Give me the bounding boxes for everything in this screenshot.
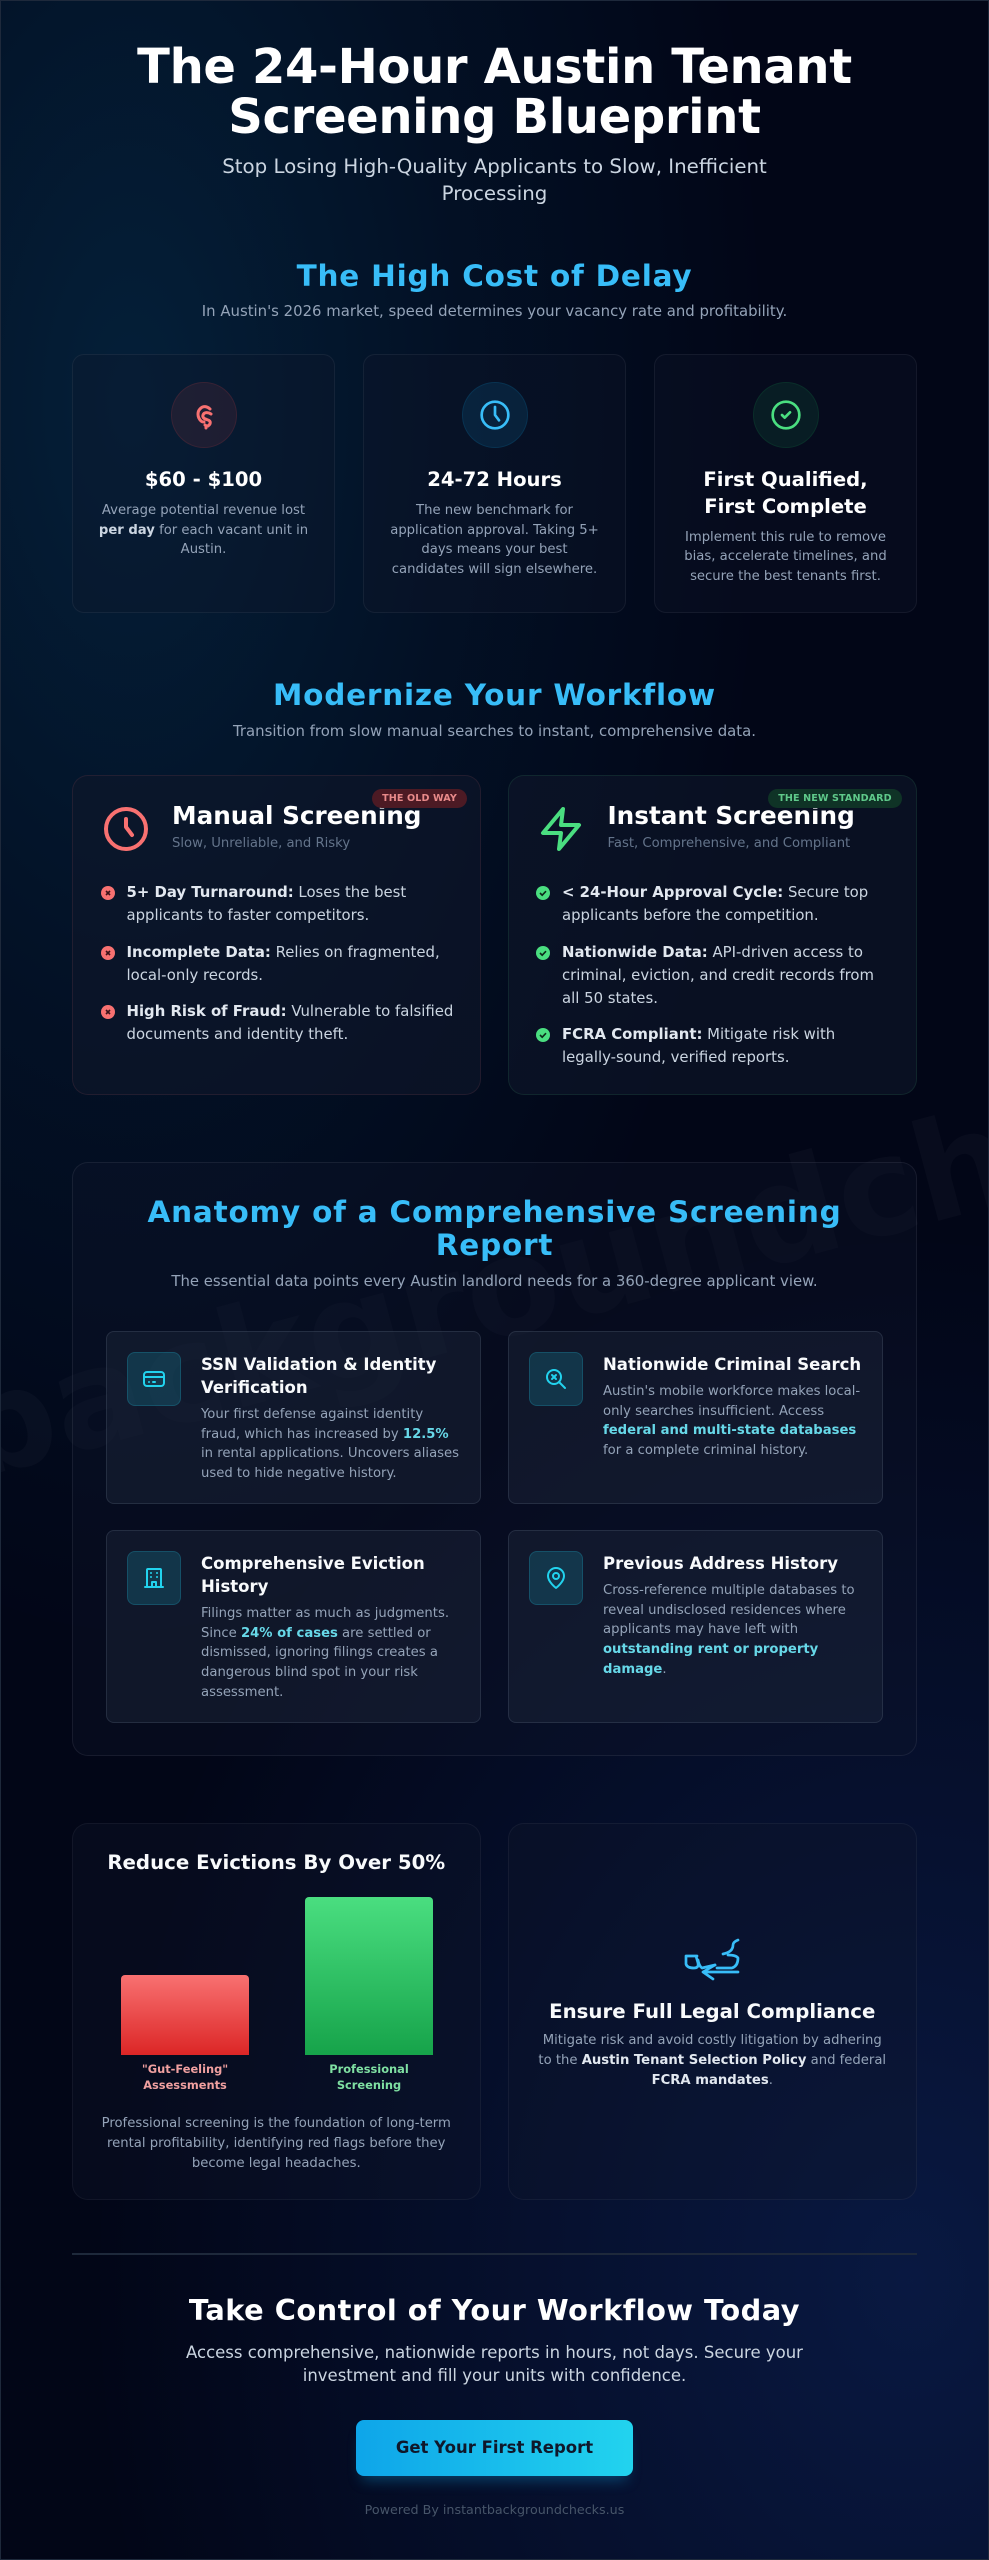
list: manual points: applicants to faster competitors. bbox=[126, 906, 369, 924]
text: SSN: fraud, which has increased by 12.5% bbox=[201, 1427, 449, 1442]
heading: instant screening: Instant Screening bbox=[608, 801, 855, 830]
text: eviction: dismissed, ignoring filings creates a bbox=[201, 1645, 438, 1660]
panel: anatomy of a report bbox=[72, 1162, 917, 1756]
heading: SSN: Verification bbox=[201, 1378, 308, 1397]
panel: cost card 2 bbox=[363, 354, 626, 613]
list: manual points: local-only records. bbox=[126, 966, 263, 984]
bar chart bbox=[121, 1897, 433, 2092]
heading: anatomy: Report bbox=[436, 1228, 553, 1262]
subheading: manual: Slow, Unreliable, and Risky bbox=[172, 836, 350, 851]
title: Screening Blueprint bbox=[228, 88, 761, 144]
icon: search bbox=[529, 1352, 583, 1406]
text: eviction: Filings matter as much as judgments. bbox=[201, 1606, 449, 1621]
footer: Powered By instantbackgroundchecks.us bbox=[365, 2502, 624, 2517]
panel: cost card 3: bias, accelerate timelines, and bbox=[684, 549, 887, 564]
icon: clock red bbox=[104, 807, 148, 851]
card: criminal search bbox=[508, 1331, 882, 1504]
heading: modernize: Modernize Your Workflow bbox=[273, 678, 716, 712]
panel: cost card 1: per day for each vacant unit in bbox=[99, 523, 308, 538]
heading: SSN: SSN Validation & Identity bbox=[201, 1355, 436, 1374]
list: instant points: FCRA Compliant: Mitigate risk with bbox=[562, 1025, 835, 1043]
heading: manual screening: Manual Screening bbox=[172, 801, 421, 830]
text: address: applicants may have left with bbox=[603, 1622, 798, 1637]
heading: address: Previous Address History bbox=[603, 1554, 838, 1573]
bar: professional bbox=[305, 1897, 433, 2055]
heading: legal compliance: Ensure Full Legal Compliance bbox=[549, 2000, 875, 2023]
text: eviction: dangerous blind spot in your risk bbox=[201, 1665, 418, 1680]
button: get your first report bbox=[356, 2420, 633, 2476]
label: gut feeling: "Gut-Feeling" bbox=[142, 2062, 228, 2076]
badge: old way bbox=[372, 789, 467, 808]
text: call to action: Access comprehensive, nationwide reports in hours, not days. Secure your bbox=[186, 2343, 803, 2362]
text: reduce evictions bbox=[102, 2116, 451, 2171]
button: get your first report: Get Your First Report bbox=[396, 2438, 593, 2457]
text: eviction: assessment. bbox=[201, 1685, 283, 1700]
panel: cost card 1: Average potential revenue lost bbox=[102, 503, 305, 518]
heading: SSN bbox=[201, 1355, 436, 1397]
subheading: instant: Fast, Comprehensive, and Compliant bbox=[608, 836, 850, 851]
panel: manual screening bbox=[72, 775, 480, 1095]
icon: check circle bbox=[753, 382, 819, 448]
heading: criminal: Nationwide Criminal Search bbox=[603, 1355, 861, 1374]
panel: cost card 3: Implement this rule to remove bbox=[685, 530, 886, 544]
text: call to action bbox=[186, 2343, 803, 2385]
text: address: Cross-reference multiple databases to bbox=[603, 1583, 855, 1598]
label: professional: Screening bbox=[337, 2078, 401, 2092]
panel: cost card 2: 24-72 Hours bbox=[427, 468, 562, 491]
text: reduce evictions: rental profitability, identifying red flags before they bbox=[107, 2136, 445, 2151]
label: gut feeling bbox=[142, 2062, 228, 2092]
panel: cost card 2: days means your best bbox=[421, 542, 568, 557]
panel: instant screening bbox=[508, 775, 916, 1095]
subheading: modernize: Transition from slow manual searches to instant, comprehensive data. bbox=[233, 722, 756, 740]
panel: cost card 2: candidates will sign elsewhere. bbox=[392, 562, 597, 577]
label: gut feeling: Assessments bbox=[143, 2078, 227, 2092]
icon: id card bbox=[127, 1352, 181, 1406]
list: manual points: documents and identity theft. bbox=[126, 1025, 348, 1043]
icon: map pin bbox=[529, 1551, 583, 1605]
list: instant points: Nationwide Data: API-driven access to bbox=[562, 942, 863, 960]
list: manual points: High Risk of Fraud: Vulnerable to falsified bbox=[126, 1002, 453, 1020]
heading: eviction bbox=[201, 1554, 425, 1596]
subtitle: Processing bbox=[442, 182, 547, 205]
panel: cost card 3: First Qualified, bbox=[703, 468, 868, 491]
heading: anatomy: Anatomy of a Comprehensive Screening bbox=[147, 1195, 842, 1229]
text: legal compliance: Mitigate risk and avoid costly litigation by adhering bbox=[543, 2033, 882, 2048]
card: address bbox=[508, 1530, 882, 1723]
card: eviction bbox=[106, 1530, 480, 1723]
bar: gut feeling bbox=[121, 1975, 249, 2055]
text: criminal: for a complete criminal history. bbox=[603, 1443, 808, 1458]
subheading: anatomy: The essential data points every Austin landlord needs for a 360-degree applicant view. bbox=[171, 1272, 818, 1290]
heading: eviction: Comprehensive Eviction bbox=[201, 1554, 425, 1573]
text: SSN: used to hide negative history. bbox=[201, 1466, 397, 1481]
panel: cost card 3: secure the best tenants first. bbox=[690, 569, 881, 584]
text: SSN: in rental applications. Uncovers aliases bbox=[201, 1446, 459, 1461]
title: The 24-Hour Austin Tenant bbox=[137, 39, 852, 95]
text: criminal: Austin's mobile workforce makes local- bbox=[603, 1384, 860, 1399]
heading: the high cost of delay: The High Cost of Delay bbox=[297, 259, 692, 293]
text: legal compliance bbox=[538, 2033, 886, 2088]
badge: new standard: THE NEW STANDARD bbox=[778, 793, 892, 804]
text: legal compliance: FCRA mandates. bbox=[652, 2073, 773, 2088]
subtitle: Stop Losing High-Quality Applicants to Slow, Inefficient bbox=[222, 155, 767, 178]
text: SSN: Your first defense against identity bbox=[201, 1407, 423, 1422]
badge: old way: THE OLD WAY bbox=[382, 793, 457, 804]
list: instant points: < 24-Hour Approval Cycle: Secure top bbox=[562, 883, 868, 901]
text: eviction: Since 24% of cases are settled or bbox=[201, 1626, 431, 1641]
heading: anatomy bbox=[147, 1195, 842, 1262]
panel: cost card 2: application approval. Taking 5+ bbox=[390, 523, 599, 538]
text: address: reveal undisclosed residences where bbox=[603, 1603, 846, 1618]
heading: eviction: History bbox=[201, 1577, 268, 1596]
text: criminal: federal and multi-state databases bbox=[603, 1423, 856, 1438]
list: instant points: legally-sound, verified reports. bbox=[562, 1048, 789, 1066]
card: SSN bbox=[106, 1331, 480, 1504]
panel: cost card 3: First Complete bbox=[704, 495, 867, 518]
heading: reduce evictions: Reduce Evictions By Over 50% bbox=[107, 1851, 445, 1874]
title bbox=[137, 39, 852, 144]
label: professional: Professional bbox=[329, 2062, 409, 2076]
badge: new standard bbox=[768, 789, 902, 808]
list: instant points: applicants before the competition. bbox=[562, 906, 819, 924]
panel: cost card 1: Austin. bbox=[181, 542, 226, 557]
list: manual points bbox=[101, 883, 453, 1043]
text: address: damage. bbox=[603, 1662, 667, 1677]
icon: clock bbox=[462, 382, 528, 448]
subtitle bbox=[222, 155, 767, 205]
label: professional bbox=[329, 2062, 409, 2092]
list: instant points bbox=[536, 883, 874, 1066]
panel: reduce evictions bbox=[72, 1823, 480, 2200]
icon: legal glyph bbox=[684, 1938, 740, 1980]
text: legal compliance: to the Austin Tenant Selection Policy and federal bbox=[538, 2053, 886, 2068]
text: address: outstanding rent or property bbox=[603, 1642, 818, 1657]
text: criminal bbox=[603, 1384, 860, 1458]
subheading: cost: In Austin's 2026 market, speed determines your vacancy rate and profitability. bbox=[202, 302, 787, 320]
text: address bbox=[603, 1583, 855, 1677]
icon: lightning bbox=[540, 807, 582, 851]
icon: building bbox=[127, 1551, 181, 1605]
text: SSN bbox=[201, 1407, 459, 1481]
panel: cost card 2: The new benchmark for bbox=[416, 503, 573, 518]
text: reduce evictions: Professional screening is the foundation of long-term bbox=[102, 2116, 451, 2131]
panel: cost card 1: $60 - $100 bbox=[145, 468, 262, 491]
list: instant points: all 50 states. bbox=[562, 988, 658, 1006]
icon: dollar bbox=[171, 382, 237, 448]
list: instant points: criminal, eviction, and credit records from bbox=[562, 966, 874, 984]
divider bbox=[72, 2253, 917, 2255]
panel: cost card 3 bbox=[654, 354, 917, 613]
text: criminal: only searches insufficient. Access bbox=[603, 1404, 824, 1419]
text: eviction bbox=[201, 1606, 449, 1700]
list: manual points: Incomplete Data: Relies on fragmented, bbox=[126, 942, 440, 960]
heading: take control: Take Control of Your Workflow Today bbox=[189, 2293, 800, 2327]
list: manual points: 5+ Day Turnaround: Loses the best bbox=[126, 883, 406, 901]
text: call to action: investment and fill your units with confidence. bbox=[303, 2366, 686, 2385]
panel: legal compliance bbox=[508, 1823, 916, 2200]
panel: cost card 1 bbox=[72, 354, 335, 613]
text: reduce evictions: become legal headaches. bbox=[192, 2156, 361, 2171]
